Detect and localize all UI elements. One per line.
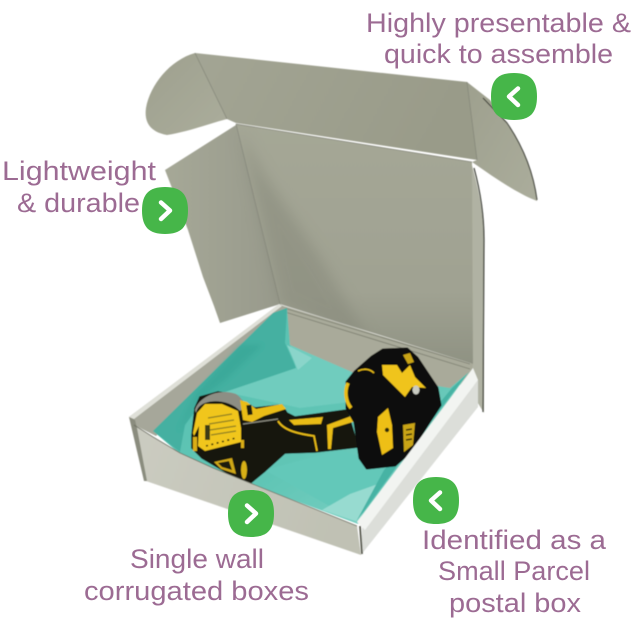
battery yellow edge: [346, 383, 351, 408]
box corner tab: [129, 417, 147, 481]
lid top panel: [195, 53, 477, 160]
battery white button: [412, 386, 420, 394]
right side strip with corrugated edge: [471, 162, 484, 413]
label text: Identified as a: [422, 525, 607, 555]
yellow neck: [240, 400, 286, 422]
shadow on back panel: [240, 130, 372, 345]
callout: small parcel: postal box: [449, 588, 582, 618]
callout: small parcel: Small Parcel: [438, 556, 590, 586]
box front face: [134, 425, 361, 555]
handle stripes: [289, 417, 323, 425]
callout: lightweight and durable: [2, 156, 188, 234]
battery yellow side panel: [377, 408, 393, 455]
grey chuck band: [195, 392, 244, 413]
heading text: Highly presentable &: [366, 8, 631, 38]
label text: Single wall: [130, 544, 264, 574]
drill body: [192, 392, 358, 485]
box interior back wall: [280, 305, 473, 390]
callout: highly presentable: quick to assemble: [384, 39, 613, 69]
callout: single wall: corrugated boxes: [84, 576, 309, 606]
callout: highly presentable: [366, 8, 631, 120]
yellow head: [193, 404, 241, 451]
icon: left chevron badge: [491, 73, 537, 120]
yellow side accents: [193, 437, 197, 451]
box front corner fold: [360, 526, 362, 554]
battery label: [403, 423, 415, 452]
tissue paper: [153, 308, 469, 524]
tissue folds: [153, 308, 296, 452]
back lid panel: [236, 124, 473, 364]
collar label: [214, 458, 236, 474]
label on head: [208, 414, 236, 435]
callout: single wall: [84, 490, 309, 606]
label text: Lightweight: [2, 156, 157, 186]
icon: left chevron badge: [413, 477, 459, 524]
cordless drill: [192, 349, 440, 485]
icon: right chevron badge: [142, 187, 188, 234]
icon: right chevron badge: [228, 490, 274, 537]
left ear of lid: [146, 53, 227, 135]
box illustration: [129, 53, 537, 555]
right ear of lid: [467, 82, 537, 201]
box left rim: [129, 304, 282, 419]
box interior left wall: [129, 304, 288, 436]
callout: small parcel: [413, 477, 607, 618]
box right face: [361, 380, 478, 555]
corrugated edge of right ear: [483, 98, 537, 200]
left side flap: [165, 125, 280, 323]
box right rim: [357, 368, 478, 530]
callout: lightweight and durable: & durable: [17, 188, 140, 218]
dots on head: [206, 438, 236, 446]
battery: [347, 349, 440, 468]
battery yellow logo: [382, 365, 426, 397]
